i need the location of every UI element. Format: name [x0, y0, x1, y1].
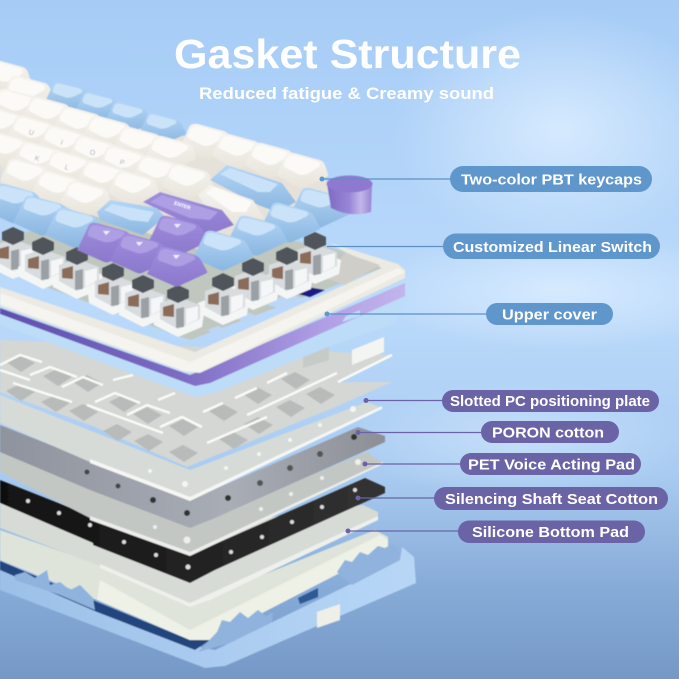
key legends: K	[34, 155, 41, 163]
key legends: P	[119, 159, 126, 167]
callout: PORON cotton	[356, 421, 619, 443]
callout: Upper cover	[324, 303, 613, 325]
callout: Customized Linear Switch: Customized Linear Switch	[453, 239, 652, 256]
layer: silicone bottom pad	[0, 500, 378, 607]
layer: silencing shaft seat cotton	[0, 478, 385, 583]
layer: lower plate sheet	[0, 395, 382, 501]
key: shift	[97, 200, 165, 235]
callout: PET Voice Acting Pad: PET Voice Acting Pad	[468, 456, 635, 474]
keycaps	[0, 60, 350, 286]
callout: PET Voice Acting Pad	[362, 453, 641, 475]
key legends	[28, 129, 126, 172]
callout: Silicone Bottom Pad: Silicone Bottom Pad	[472, 524, 629, 541]
key: enter: ENTER	[173, 201, 191, 212]
layer: slotted PC positioning plate	[0, 337, 392, 467]
callout: Customized Linear Switch	[327, 234, 660, 259]
key: wide white	[198, 185, 264, 228]
callout: Silencing Shaft Seat Cotton	[356, 487, 668, 510]
callout: Slotted PC positioning plate: Slotted PC positioning plate	[450, 393, 650, 410]
subtitle: Reduced fatigue & Creamy sound	[199, 84, 494, 103]
callout: PORON cotton: PORON cotton	[492, 424, 604, 442]
title: Gasket Structure	[174, 31, 521, 77]
key legends: I	[60, 139, 64, 147]
callout: Slotted PC positioning plate	[364, 390, 659, 412]
exploded keyboard illustration	[0, 60, 416, 668]
layer: upper cover	[0, 210, 405, 397]
callout: Silencing Shaft Seat Cotton: Silencing Shaft Seat Cotton	[445, 491, 658, 508]
callout: Upper cover: Upper cover	[502, 306, 597, 324]
layer: PET voice acting pad	[0, 450, 383, 556]
key: backspace	[210, 165, 296, 212]
callout: Silicone Bottom Pad	[346, 520, 645, 543]
linear switches	[0, 227, 341, 337]
callout: Two-color PBT keycaps: Two-color PBT keycaps	[461, 172, 642, 188]
key legends: U	[28, 129, 35, 137]
callout: Two-color PBT keycaps	[320, 166, 652, 192]
key: enter	[143, 192, 234, 237]
key legends: O	[89, 149, 96, 158]
knob	[326, 176, 372, 214]
layer: PORON cotton	[0, 425, 385, 528]
key legends: L	[64, 164, 70, 172]
layer: bottom case	[0, 530, 416, 668]
